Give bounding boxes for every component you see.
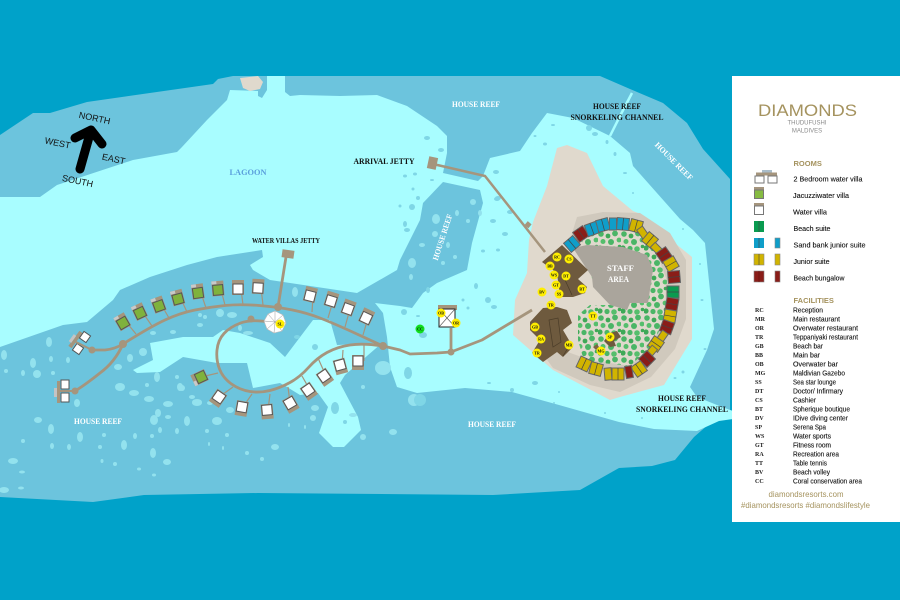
island facility markers: BT [579,286,585,292]
facilities names: Cashier [793,396,816,404]
website: diamondsresorts.com [768,489,844,499]
island facility markers: GT [553,282,559,288]
island facility markers: TR [534,350,540,356]
logo: DIAMONDS [758,102,857,120]
map label: staff area [607,263,634,284]
island facility markers: RC [554,254,560,260]
island facility markers: CS [566,256,572,262]
facilities codes: RA [755,452,764,458]
facilities names: Water sports [793,432,831,440]
map label: house reef centre: HOUSE REEF [431,213,454,261]
facilities codes: MR [755,317,766,323]
lagoon coral patches [294,124,706,424]
facilities names: Serena Spa [793,422,827,432]
facilities names: Teppaniyaki restaurant [793,332,859,342]
main buildings south [530,307,573,362]
gazebo: sea star lounge [264,311,286,333]
island facility markers: BV [539,290,545,294]
jetties and walkways [75,257,532,410]
island facility markers: SP [608,334,613,340]
island facility markers: DT [563,274,569,278]
facilities names: Table tennis [793,458,827,468]
spa building [604,331,621,347]
map label: north snorkeling channel: HOUSE REEF [593,102,641,111]
rooms legend text: Beach bungalow [794,274,845,282]
gardens [578,230,667,366]
map label: south snorkeling channel: SNORKELING CHANNEL [636,405,728,414]
map label: lagoon: LAGOON [230,167,267,177]
lagoon [0,76,733,431]
facilities codes: BT [755,407,763,413]
facilities names: Recreation area [793,450,840,458]
snorkeling channel [610,93,632,136]
rooms legend text: 2 Bedroom water villa [794,174,863,184]
facilities codes: OR [755,326,765,332]
main island [427,145,692,400]
coral conservation area marker: CC [417,326,423,332]
facilities names: Spherique boutique [793,404,850,414]
facilities codes: GB [755,344,764,350]
facilities names: Maldivian Gazebo [793,368,845,378]
facilities codes: SS [755,380,762,386]
facilities codes: DV [755,416,764,422]
island facility markers: BB [547,264,553,268]
facilities codes: BV [755,470,764,476]
facilities codes: WS [755,434,765,440]
map label: staff area: AREA [608,274,630,284]
facilities names: Sea star lounge [793,378,836,386]
facilities codes: TT [755,461,763,467]
reef coral patches [0,199,482,493]
inner lagoon shallows [133,320,382,447]
legend panel [732,76,900,522]
jacuzzi water villas [113,281,225,386]
two bedroom water villa north [70,331,92,355]
map label: staff area: STAFF [607,263,634,273]
map label: north snorkeling channel: SNORKELING CHANNEL [570,113,664,122]
facilities names: IDive diving center [793,414,848,422]
overwater restaurant and bar: OB [438,310,444,316]
overwater restaurant and bar [436,305,460,328]
water villas [209,279,375,419]
island facility markers: MR [566,342,572,348]
main buildings north [542,245,588,297]
small sand island [240,76,263,91]
rooms legend text: Junior suite [794,257,830,266]
compass arrow [75,130,102,169]
facilities codes: CS [755,398,763,404]
facilities names: Beach volley [793,468,830,476]
facilities names: Doctor/ Infirmary [793,386,843,396]
coral conservation area marker [416,324,424,334]
compass: NORTH [78,110,111,126]
rooms legend icons [754,170,780,282]
overwater restaurant and bar: OR [453,320,459,326]
island beach [513,145,692,400]
compass: EAST [101,152,127,167]
map label: arrival jetty: ARRIVAL JETTY [354,157,415,166]
island facility markers: GB [532,324,538,330]
facilities names: Main bar [793,350,820,360]
facilities names: Overwater bar [793,360,838,368]
logo [758,102,857,134]
facilities codes: MG [755,371,766,377]
map label: house reef west: HOUSE REEF [74,417,122,426]
map label: house reef south: HOUSE REEF [468,420,516,429]
beach huts ring [564,217,681,380]
facilities codes: GT [755,443,764,449]
map label: south snorkeling channel [636,394,728,414]
facilities names: Coral conservation area [793,476,863,486]
two bedroom water villa south [54,380,75,403]
gazebo: sea star lounge: SL [278,322,283,326]
rooms legend text: Water villa [793,208,828,216]
resort interior [560,231,666,366]
facilities names: Main restaurant [793,314,841,324]
compass: WEST [44,135,72,151]
facilities names: Reception [793,306,823,314]
facilities names: Fitness room [793,440,831,450]
compass [44,110,127,189]
gazebo building [593,344,599,350]
map label: north snorkeling channel [570,102,664,122]
island facility markers: WS [551,272,558,278]
island facility markers: MG [598,348,604,354]
facilities codes: CC [755,479,764,485]
compass: SOUTH [61,173,94,189]
vegetation ground [540,212,686,392]
outer reef [0,76,730,502]
facilities codes: OB [755,362,764,368]
map label: house reef east: HOUSE REEF [653,140,695,182]
rooms heading: ROOMS [794,159,822,168]
walkway nodes [72,303,454,394]
facilities codes [755,308,766,485]
facilities codes: SP [755,425,762,431]
facilities codes: BB [755,353,763,359]
facilities names: Overwater restaurant [793,324,859,332]
island facility markers: RA [538,336,544,342]
facilities names: Beach bar [793,342,823,350]
map label: south snorkeling channel: HOUSE REEF [658,394,706,403]
island facility markers: TT [590,314,596,318]
rooms legend text: Sand bank junior suite [794,240,866,250]
building roof lines [549,280,572,356]
water villas jetty head [282,249,294,259]
facilities codes: DT [755,389,763,395]
rooms legend text: Jacuzziwater villa [793,191,850,200]
logo: THUDUFUSHI [788,120,827,126]
island facility markers: TR [548,302,554,308]
logo: MALDIVES [792,128,822,134]
facilities codes: TR [755,335,764,341]
facilities names [793,306,863,486]
facilities codes: RC [755,308,764,314]
map label: house reef north: HOUSE REEF [452,100,500,109]
staff area [573,245,653,310]
island facility markers: SS [557,292,562,296]
island facility markers [530,252,614,358]
map label: water villas jetty: WATER VILLAS JETTY [252,236,320,245]
arrival jetty walkway [427,156,545,252]
hashtags: #diamondsresorts #diamondslifestyle [741,500,870,510]
rooms legend text: Beach suite [794,224,830,233]
rooms legend text [793,174,866,282]
facilities heading: FACILITIES [794,296,834,305]
